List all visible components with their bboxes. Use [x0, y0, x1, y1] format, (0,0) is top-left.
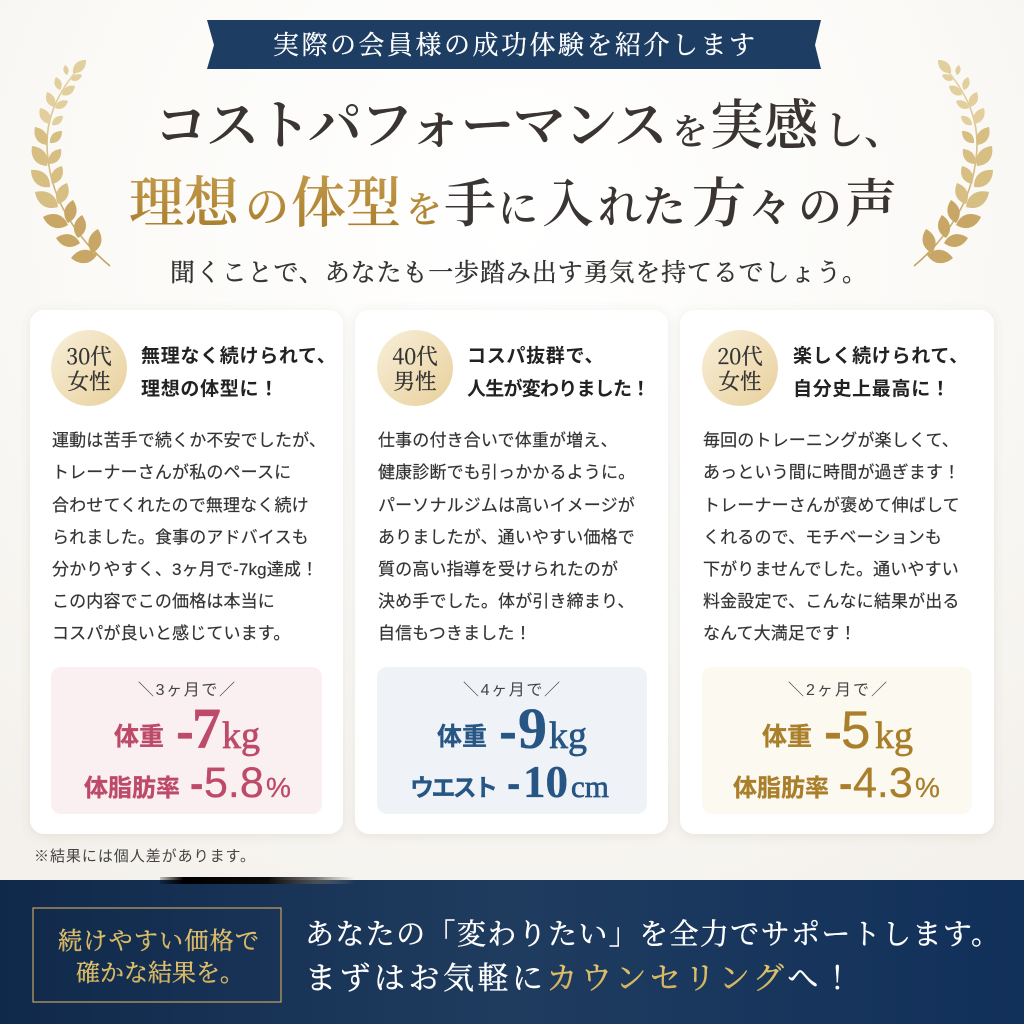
- card heading: [793, 345, 969, 400]
- result box: 体脂肪率: [84, 775, 180, 802]
- result box: -: [507, 762, 520, 806]
- result box: -: [824, 706, 842, 758]
- title line 2: に: [498, 186, 538, 231]
- body text: パーソナルジムは高いイメージが: [378, 496, 635, 515]
- result box: -: [190, 762, 203, 806]
- result box: -: [499, 706, 517, 758]
- footer message line 1: あなたの「変わりたい」を全力でサポートします。: [305, 918, 1000, 951]
- title line 2: 方: [692, 174, 746, 234]
- body text: [703, 431, 960, 643]
- body text: 毎回のトレーニングが楽しくて、: [703, 431, 959, 450]
- title line 1: 実感: [710, 96, 821, 156]
- result box: 体重: [437, 723, 487, 751]
- panel: testimonial 2: [355, 310, 668, 834]
- body text: 仕事の付き合いで体重が増え、: [378, 431, 618, 450]
- badge: 20代女性: 女性: [718, 365, 762, 396]
- result box: -: [176, 706, 194, 758]
- body text: 合わせてくれたので無理なく続け: [52, 496, 309, 515]
- banner ribbon: [207, 20, 821, 69]
- result box: kg: [875, 715, 913, 757]
- title line 1: コストパフォーマンス: [154, 96, 668, 156]
- badge: 20代女性: 20代: [717, 340, 763, 371]
- body text: 料金設定で、こんなに結果が出る: [703, 592, 960, 611]
- badge: 30代女性: 30代: [66, 340, 112, 371]
- gold framed callout: 確かな結果を。: [76, 960, 244, 987]
- badge: 30代女性: 女性: [67, 365, 111, 396]
- gold framed callout: [33, 908, 281, 1002]
- panel: testimonial 1: [30, 310, 343, 834]
- card heading: 無理なく続けられて、: [141, 345, 336, 367]
- title line 2: を: [406, 190, 442, 230]
- icon: right laurel wreath: [914, 57, 997, 266]
- result box: 体重: [762, 723, 812, 751]
- subtitle: 聞くことで、あなたも一歩踏み出す勇気を持てるでしょう。: [170, 259, 867, 287]
- result box: %: [915, 772, 940, 803]
- badge: 40代男性: [377, 330, 453, 406]
- body text: [378, 431, 635, 643]
- result box: 体脂肪率: [733, 775, 829, 802]
- card heading: [467, 345, 651, 400]
- result box: ＼4ヶ月で／: [463, 682, 560, 699]
- title line 2: 々: [748, 183, 792, 232]
- card heading: 理想の体型に！: [141, 378, 279, 400]
- result box: 4.3: [853, 759, 913, 807]
- title line 1: を: [672, 112, 708, 152]
- title line 2: の: [798, 183, 842, 232]
- result box: 7: [192, 696, 221, 761]
- title line 1: し、: [824, 108, 904, 153]
- title line 2: 声: [845, 177, 897, 234]
- body text: トレーナーさんが褒めて伸ばして: [703, 496, 960, 515]
- result box: %: [266, 772, 291, 803]
- banner text: 実際の会員様の成功体験を紹介します: [273, 31, 755, 60]
- result box: kg: [549, 715, 587, 757]
- title line 2: 手: [444, 177, 496, 234]
- body text: なんて大満足です！: [703, 624, 856, 643]
- result box: ＼2ヶ月で／: [788, 682, 887, 699]
- body text: コスパが良いと感じています。: [52, 624, 290, 643]
- body text: [52, 431, 326, 643]
- badge: 30代女性: [51, 330, 127, 406]
- badge: 20代女性: [702, 330, 778, 406]
- icon: left laurel wreath: [27, 57, 110, 266]
- body text: トレーナーさんが私のペースに: [52, 463, 291, 482]
- result box: [377, 667, 647, 814]
- result box: ウエスト: [410, 775, 498, 802]
- result box: 5.8: [204, 759, 264, 807]
- card heading: コスパ抜群で、: [467, 345, 604, 367]
- footer band: [0, 877, 1024, 1024]
- result box: [51, 667, 322, 814]
- footnote: ※結果には個人差があります。: [34, 848, 255, 865]
- card heading: 人生が変わりました！: [467, 377, 651, 400]
- body text: くれるので、モチベーションも: [703, 528, 942, 547]
- footer message line 2: まずはお気軽にカウンセリングへ！: [305, 961, 856, 996]
- card heading: 楽しく続けられて、: [793, 345, 969, 367]
- title line 2: 理想: [129, 173, 241, 234]
- body text: 質の高い指導を受けられたのが: [378, 560, 618, 579]
- body text: ありましたが、通いやすい価格で: [378, 528, 635, 547]
- card heading: 自分史上最高に！: [793, 378, 951, 400]
- body text: 分かりやすく、3ヶ月で-7kg達成！: [52, 560, 318, 579]
- badge: 40代男性: 40代: [392, 340, 438, 371]
- badge: 40代男性: 男性: [393, 365, 437, 396]
- title line 2: 体型: [291, 173, 401, 234]
- result box: ＼3ヶ月で／: [138, 682, 235, 699]
- body text: られました。食事のアドバイスも: [52, 528, 309, 547]
- body text: 運動は苦手で続くか不安でしたが、: [52, 431, 326, 450]
- body text: あっという間に時間が過ぎます！: [703, 463, 960, 482]
- body text: 下がりませんでした。通いやすい: [703, 560, 959, 579]
- title line 2: れた: [598, 183, 686, 232]
- body text: この内容でこの価格は本当に: [52, 592, 275, 611]
- result box: kg: [222, 715, 260, 757]
- title line 2: 入: [542, 177, 594, 234]
- title line 2: の: [245, 183, 289, 232]
- result box: 10: [523, 757, 568, 807]
- body text: 自信もつきました！: [378, 624, 532, 643]
- panel: testimonial 3: [680, 310, 994, 834]
- body text: 健康診断でも引っかかるように。: [378, 463, 635, 482]
- result box: 9: [518, 696, 547, 761]
- result box: 5: [841, 701, 870, 760]
- result box: -: [839, 762, 852, 806]
- gold framed callout: 続けやすい価格で: [58, 928, 259, 955]
- result box: cm: [571, 769, 609, 804]
- result box: 体重: [114, 723, 164, 751]
- result box: [702, 667, 972, 814]
- card heading: [141, 345, 336, 400]
- body text: 決め手でした。体が引き締まり、: [378, 592, 635, 611]
